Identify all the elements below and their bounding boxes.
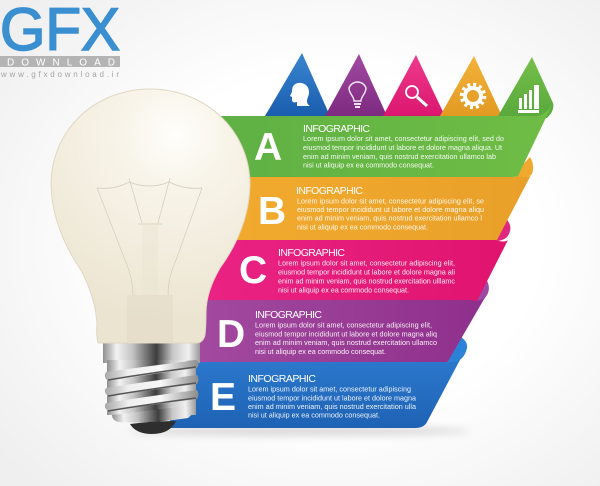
heading A: INFOGRAPHIC xyxy=(303,123,370,135)
body text B: eiusmod tempor incididunt ut labore et dolore magna aliqu xyxy=(297,205,484,214)
body text C: enim ad minim veniam, quis nostrud exercitation ulllamc xyxy=(278,276,455,286)
icon: light bulb xyxy=(349,82,366,107)
tab: orange with gear icon xyxy=(440,56,502,116)
ribbon D: purple xyxy=(197,294,487,363)
letter D: D xyxy=(217,313,245,356)
body text C: Lorem ipsum dolor sit amet, consectetur adipiscing elit, xyxy=(278,258,455,268)
body text B: Lorem ipsum dolor sit amet, consectetur adipiscing elit, se xyxy=(297,196,484,206)
logo: GFX Download: DOWNLOAD xyxy=(7,58,115,68)
body text C xyxy=(278,258,455,294)
body text A: Lorem ipsum dolor sit amet, consectetur adipiscing elit, sed do xyxy=(303,134,504,143)
curl: pink xyxy=(488,217,510,241)
letter A: A xyxy=(254,126,282,169)
letter C: C xyxy=(239,249,267,292)
body text A: eiusmod tempor incididunt ut labore et dolore magna aliqua. Ut xyxy=(303,143,502,152)
heading C: INFOGRAPHIC xyxy=(278,247,345,259)
curl: blue xyxy=(442,337,467,363)
body text E: enim ad minim veniam, quis nostrud exercitation ulla xyxy=(248,402,416,411)
ground shadow xyxy=(130,426,470,436)
ribbon B: orange xyxy=(200,175,531,240)
heading D: INFOGRAPHIC xyxy=(255,309,322,321)
body text D xyxy=(255,320,437,356)
ribbon E: blue xyxy=(170,358,461,428)
tab: pink with magnifier icon xyxy=(383,55,445,116)
letter B: B xyxy=(258,190,286,233)
light bulb xyxy=(51,89,250,434)
body text A: nisi ut aliquip ex ea commodo consequat. xyxy=(303,160,434,170)
curl: purple xyxy=(462,276,489,302)
ribbon A: green xyxy=(200,103,553,177)
ribbon C: pink xyxy=(200,240,508,301)
body text D: enim ad minim veniam, quis nostrud exercitation ullamco xyxy=(255,338,437,347)
body text E: nisi ut aliquip ex ea commodo consequat. xyxy=(248,410,380,420)
icon: head xyxy=(290,83,310,106)
top tabs xyxy=(265,53,553,118)
body text E xyxy=(248,384,416,420)
body text C: eiusmod tempor incididunt ut labore et dolore magna ali xyxy=(278,268,455,276)
logo: GFX Download: www.gfxdownload.ir xyxy=(0,70,119,79)
body text B: nisi ut aliquip ex ea commodo consequat. xyxy=(297,222,428,232)
body text E: eiusmod tempor incididunt ut labore et dolore magna xyxy=(248,394,416,402)
icon: magnifier xyxy=(406,86,427,106)
filament xyxy=(97,178,202,342)
tab: green with bars icon xyxy=(498,57,553,118)
tab: blue with head icon xyxy=(265,53,330,116)
body text D: eiusmod tempor incididunt ut labore et dolore magna aliq xyxy=(255,330,437,338)
body text D: Lorem ipsum dolor sit amet, consectetur adipiscing elit, xyxy=(255,320,432,330)
tab: purple with bulb icon xyxy=(325,54,387,116)
body text D: nisi ut aliquip ex ea commodo consequat. xyxy=(255,347,386,356)
body text E: Lorem ipsum dolor sit amet, consectetur adipiscing xyxy=(248,384,411,394)
body text A: enim ad minim veniam, quis nostrud exercitation ullamco lab xyxy=(303,152,496,161)
screw base xyxy=(103,343,200,434)
body text C: nisi ut aliquip ex ea commodo consequat. xyxy=(278,286,409,294)
glass xyxy=(51,89,250,343)
body text B: enim ad minim veniam, quis nostrud exercitation ullamco l xyxy=(297,214,482,222)
body text A xyxy=(303,134,504,170)
icon: gear xyxy=(462,84,484,108)
heading E: INFOGRAPHIC xyxy=(248,373,316,385)
letter E: E xyxy=(210,376,236,419)
curl: orange xyxy=(512,157,533,178)
heading B: INFOGRAPHIC xyxy=(296,185,363,197)
body text B xyxy=(297,196,484,232)
icon: bar chart xyxy=(518,85,539,113)
